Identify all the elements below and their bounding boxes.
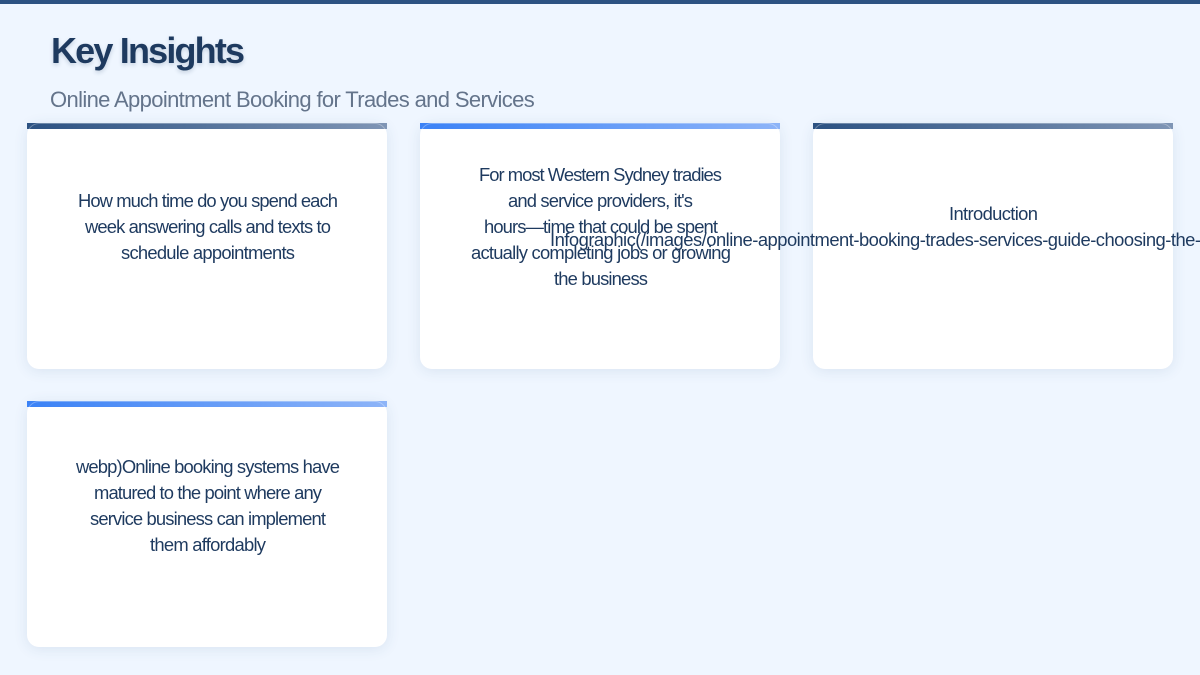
text block: card 3: Infographic(/images/online-appointment-booking-trades-services-guide-choosing-the- xyxy=(550,229,1200,250)
text block: card 2: and service providers, it's xyxy=(508,190,693,211)
card 1 accent bar xyxy=(27,123,387,129)
title: Key Insights xyxy=(51,30,243,71)
top accent bar xyxy=(0,0,1200,4)
text block: card 2: the business xyxy=(554,268,648,289)
text block: card 4: them affordably xyxy=(150,534,267,555)
text block: card 4: service business can implement xyxy=(90,508,326,529)
card 3 accent bar xyxy=(813,123,1173,129)
panel: card 1 xyxy=(27,123,387,369)
text block: card 2 xyxy=(471,164,731,289)
text block: card 4: webp)Online booking systems have xyxy=(75,456,340,477)
text block: card 3: Introduction xyxy=(949,203,1038,224)
text block: card 1: week answering calls and texts to xyxy=(84,216,331,237)
subtitle: Online Appointment Booking for Trades and Services xyxy=(50,87,534,112)
card 4 accent bar xyxy=(27,401,387,407)
text block: card 1 xyxy=(78,190,338,263)
panel: card 2 xyxy=(420,123,780,369)
text block: card 2: For most Western Sydney tradies xyxy=(479,164,722,185)
panel: card 3 xyxy=(813,123,1173,369)
panel: card 4 xyxy=(27,401,387,647)
text block: card 2: hours—time that could be spent xyxy=(484,216,718,237)
card 2 accent bar xyxy=(420,123,780,129)
text block: card 4: matured to the point where any xyxy=(94,482,323,503)
text block: card 2: actually completing jobs or growing xyxy=(471,242,731,263)
text block: card 1: schedule appointments xyxy=(121,242,295,263)
text block: card 4 xyxy=(75,456,340,555)
text block: card 1: How much time do you spend each xyxy=(78,190,338,211)
text block: card 3 xyxy=(550,203,1200,250)
